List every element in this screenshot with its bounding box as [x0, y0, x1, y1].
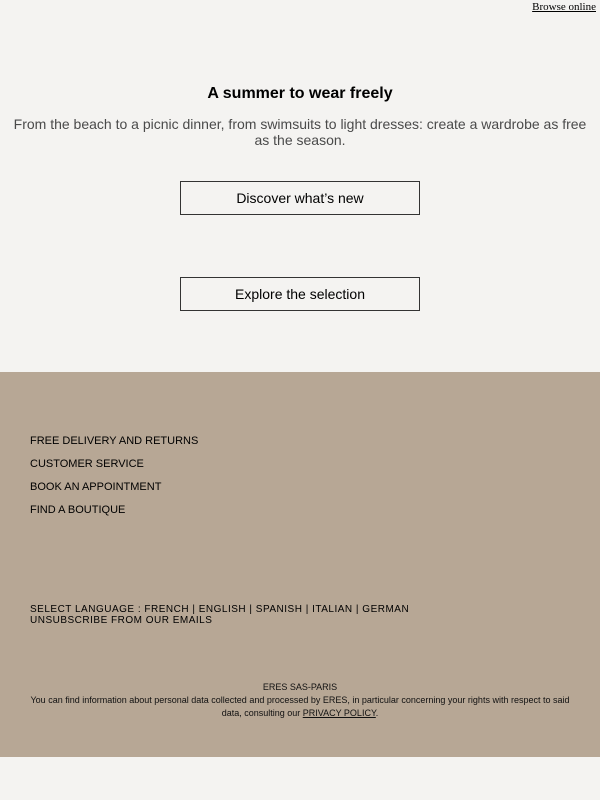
legal text — [30, 682, 569, 718]
button: discover what's new — [180, 181, 420, 215]
panel: footer — [0, 372, 600, 757]
title: A summer to wear freely — [207, 85, 393, 102]
footer link: free delivery and returns: FREE DELIVERY AND RETURNS — [30, 435, 198, 447]
link: browse online: Browse online — [532, 1, 596, 13]
button: discover what's new: Discover what’s new — [236, 190, 364, 206]
footer link: customer service: CUSTOMER SERVICE — [30, 458, 144, 470]
footer link: book an appointment: BOOK AN APPOINTMENT — [30, 481, 161, 493]
footer link: find a boutique: FIND A BOUTIQUE — [30, 504, 125, 516]
intro text: From the beach to a picnic dinner, from swimsuits to light dresses: create a wardrobe as free as the season. — [14, 116, 586, 148]
button: explore the selection: Explore the selection — [235, 286, 365, 302]
button: explore the selection — [180, 277, 420, 311]
legal text: ERES SAS-PARIS — [263, 682, 337, 692]
language selector and unsubscribe — [30, 604, 409, 626]
legal text: You can find information about personal data collected and processed by ERES, in particular concerning your rights with respect to said data, consulting our PRIVACY POLICY. — [30, 695, 569, 718]
language selector and unsubscribe: UNSUBSCRIBE FROM OUR EMAILS — [30, 615, 212, 626]
language selector and unsubscribe: SELECT LANGUAGE : FRENCH | ENGLISH | SPANISH | ITALIAN | GERMAN — [30, 604, 409, 615]
